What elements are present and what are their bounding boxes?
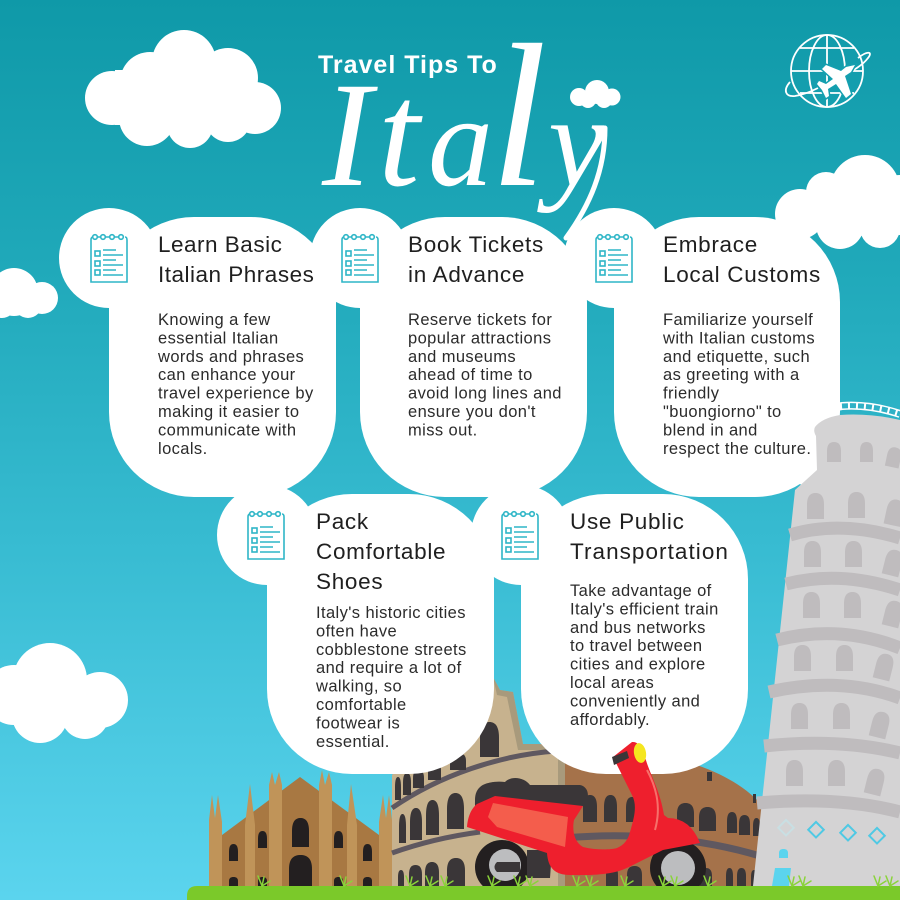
body text: Knowing a few	[158, 311, 271, 329]
grass tufts	[258, 876, 898, 886]
title: Italy: y	[537, 70, 606, 214]
illustration: red scooter	[467, 742, 706, 896]
heading: Learn Basic	[158, 232, 282, 257]
icon: notepad	[502, 512, 538, 559]
heading: Use Public	[570, 509, 685, 534]
body text: making it easier to	[158, 403, 300, 421]
card: Learn Basic Italian Phrases	[59, 208, 336, 497]
card: Book Tickets in Advance	[310, 208, 587, 497]
title: Italy	[321, 3, 606, 238]
body text: communicate with	[158, 421, 296, 439]
heading: Embrace	[663, 232, 758, 257]
body text: Italy's efficient train	[570, 600, 719, 618]
icon: notepad	[91, 235, 127, 282]
illustration: Colosseum beige front section	[392, 677, 565, 886]
cloud: top right	[775, 155, 900, 249]
icon: globe with plane	[786, 35, 870, 107]
title: Italy: a	[428, 70, 493, 214]
body text: can enhance your	[158, 366, 296, 384]
illustration: Leaning Tower of Pisa	[753, 406, 900, 886]
body text: Reserve tickets for	[408, 311, 552, 329]
cloud: small left	[0, 268, 58, 318]
body text: local areas	[570, 674, 654, 692]
body text: locals.	[158, 440, 208, 458]
title: Italy: I	[321, 52, 378, 218]
body text: Italy's historic cities	[316, 604, 466, 622]
body text: to travel between	[570, 637, 702, 655]
body text: and museums	[408, 348, 516, 366]
body text: and require a lot of	[316, 659, 462, 677]
body text: footwear is	[316, 714, 400, 732]
body text: with Italian customs	[662, 329, 815, 347]
body text: respect the culture.	[663, 440, 811, 458]
illustration: Milan cathedral	[209, 770, 392, 886]
body text: ensure you don't	[408, 403, 536, 421]
card: Embrace Local Customs	[564, 208, 840, 497]
body text: travel experience by	[158, 385, 314, 403]
body text: walking, so	[315, 678, 402, 696]
body text: "buongiorno" to	[663, 403, 782, 421]
illustration: Colosseum brown back section	[560, 749, 762, 886]
body text: popular attractions	[408, 329, 551, 347]
ground	[187, 886, 900, 900]
body text: conveniently and	[570, 692, 700, 710]
body text: Take advantage of	[570, 582, 712, 600]
body text: Familiarize yourself	[663, 311, 813, 329]
heading: in Advance	[408, 262, 525, 287]
body text: comfortable	[316, 696, 407, 714]
body text: cities and explore	[570, 656, 706, 674]
title: Italy: t	[378, 52, 423, 218]
heading: Comfortable	[316, 539, 446, 564]
title: Travel Tips To: Travel Tips To	[318, 51, 498, 79]
body text: miss out.	[408, 421, 478, 439]
card: Use Public Transportation	[471, 485, 748, 774]
body text: and etiquette, such	[663, 348, 810, 366]
body text: affordably.	[570, 711, 650, 729]
heading: Local Customs	[663, 262, 821, 287]
card: Pack Comfortable Shoes	[217, 485, 494, 774]
heading: Pack	[316, 509, 369, 534]
body text: words and phrases	[157, 348, 304, 366]
body text: as greeting with a	[663, 366, 800, 384]
heading: Shoes	[316, 569, 383, 594]
title: Italy: l	[490, 3, 547, 230]
heading: Italian Phrases	[158, 262, 314, 287]
body text: cobblestone streets	[316, 641, 467, 659]
cloud: small near title	[570, 80, 620, 108]
cloud: bottom left	[0, 643, 128, 743]
body text: essential Italian	[158, 329, 279, 347]
body text: ahead of time to	[408, 366, 533, 384]
heading: Book Tickets	[408, 232, 544, 257]
body text: avoid long lines and	[408, 385, 562, 403]
body text: often have	[316, 622, 397, 640]
body text: blend in and	[663, 421, 758, 439]
body text: friendly	[663, 385, 720, 403]
body text: essential.	[316, 733, 390, 751]
icon: notepad	[342, 235, 378, 282]
body text: and bus networks	[570, 619, 706, 637]
heading: Transportation	[570, 539, 729, 564]
icon: notepad	[248, 512, 284, 559]
cloud: large top left	[85, 30, 281, 148]
icon: notepad	[596, 235, 632, 282]
